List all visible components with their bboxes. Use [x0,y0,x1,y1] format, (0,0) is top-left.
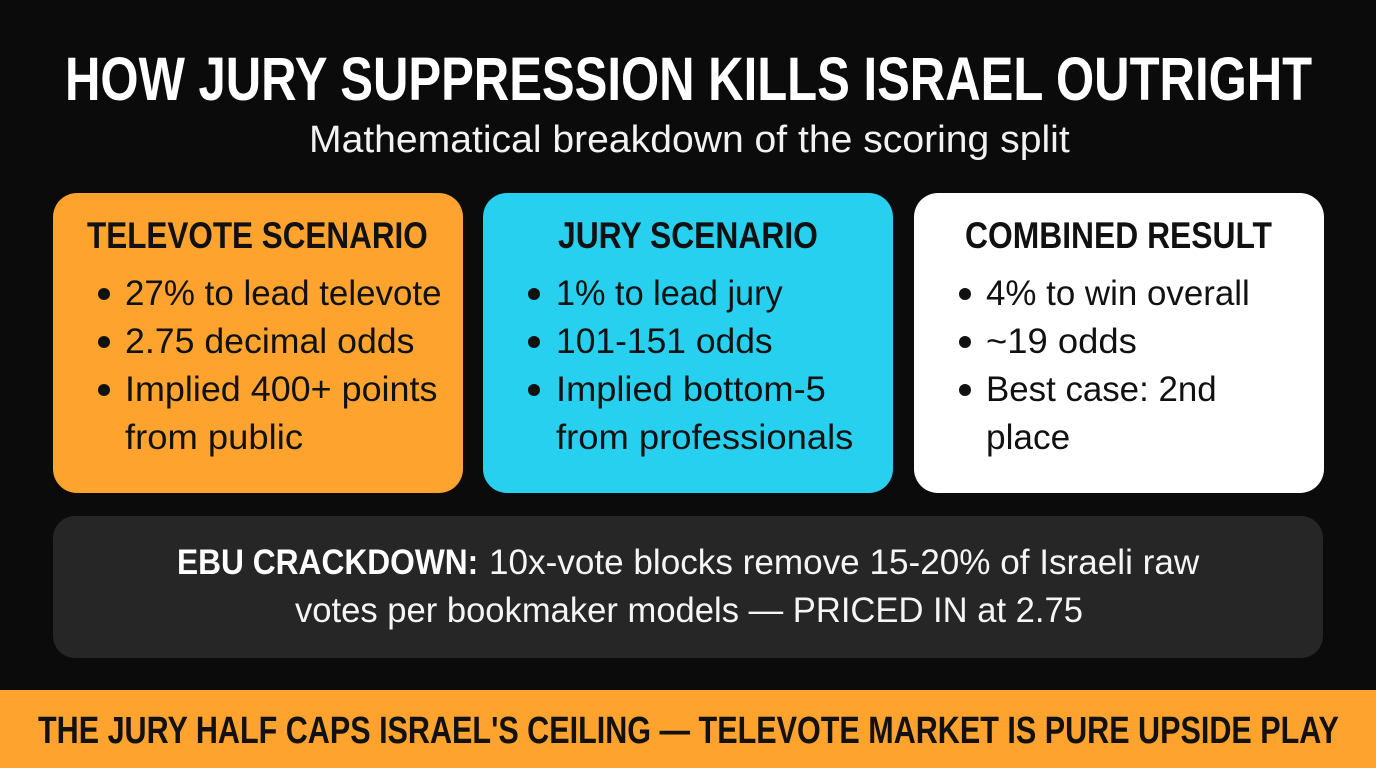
callout text line 1: 10x-vote blocks remove 15-20% of Israeli raw [489,543,1199,582]
heading: televote scenario: TELEVOTE SCENARIO [87,215,428,256]
callout label: EBU CRACKDOWN: [177,543,478,582]
subtitle: Mathematical breakdown of the scoring split [309,119,1070,161]
bullet: implied bottom-5: Implied bottom-5 [556,370,826,409]
bullet: ~19 odds: ~19 odds [986,322,1137,361]
bullet: 2.75 decimal odds: 2.75 decimal odds [125,322,414,361]
title: HOW JURY SUPPRESSION KILLS ISRAEL OUTRIGHT [65,45,1312,113]
bullet: implied 400+ points [98,370,437,457]
heading: jury scenario: JURY SCENARIO [558,215,818,256]
bullet: implied bottom-5 [528,370,853,457]
panel: EBU crackdown [53,516,1323,658]
bullet: 27% to lead televote: 27% to lead televote [125,274,442,313]
bullet: implied 400+ points: from public [125,418,303,457]
bullet: 101-151 odds: 101-151 odds [556,322,773,361]
panel: televote scenario [53,193,463,493]
bullet: best case 2nd place [959,370,1217,457]
bullet: implied 400+ points: Implied 400+ points [125,370,437,409]
bullet: implied bottom-5: from professionals [556,418,853,457]
bullet: best case 2nd place: place [986,418,1070,457]
bullet: 4% to win overall: 4% to win overall [986,274,1250,313]
panel: jury scenario [483,193,893,493]
panel: combined result [914,193,1324,493]
bullet: 1% to lead jury: 1% to lead jury [556,274,783,313]
bottom banner [0,690,1376,768]
bullet: best case 2nd place: Best case: 2nd [986,370,1217,409]
callout text line 2: votes per bookmaker models — PRICED IN at 2.75 [295,591,1083,630]
banner text: THE JURY HALF CAPS ISRAEL'S CEILING — TELEVOTE MARKET IS PURE UPSIDE PLAY [38,710,1339,752]
heading: combined result: COMBINED RESULT [965,215,1272,256]
